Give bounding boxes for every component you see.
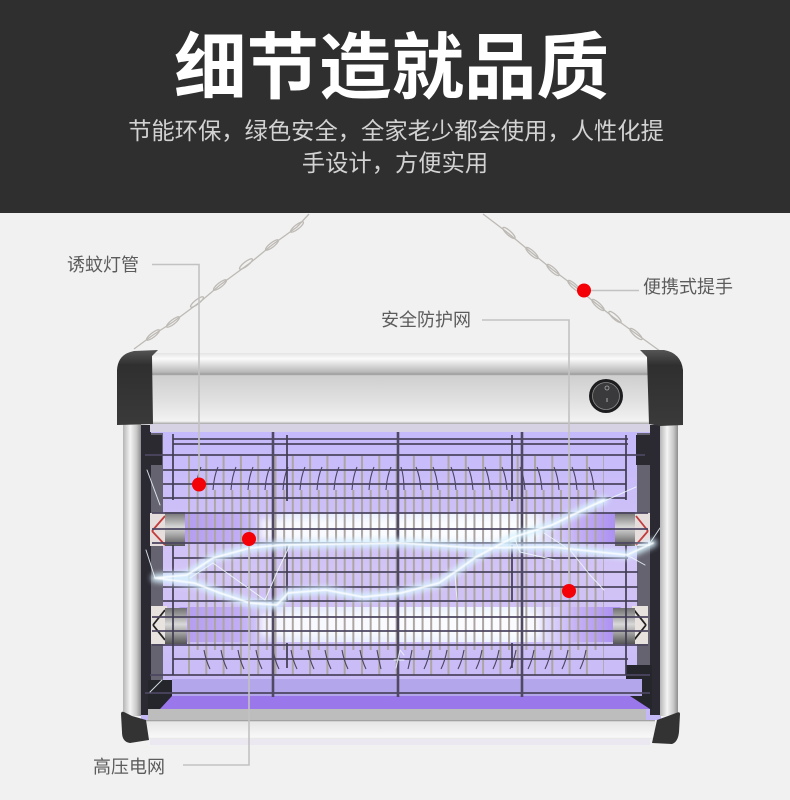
callout: safety net line [482, 320, 576, 598]
silver wires [188, 456, 604, 675]
chains [134, 214, 660, 351]
subtitle text [128, 118, 664, 176]
right bottom cap [652, 712, 680, 744]
left chain [134, 214, 309, 349]
upper tube [178, 513, 622, 544]
callout: lure lamp line [152, 264, 206, 492]
callout: high voltage grid line [183, 532, 256, 765]
arc branches [146, 470, 660, 692]
lower tube [178, 607, 622, 642]
power switch [589, 379, 623, 413]
right chain [483, 214, 660, 351]
lower right socket [613, 606, 648, 644]
electric arcs [146, 470, 660, 692]
left top corner cap [117, 350, 158, 425]
lower left socket [151, 606, 187, 644]
arc glow [155, 500, 653, 605]
callout: handle line [577, 284, 639, 298]
fluorescent tubes [150, 512, 650, 644]
horizontal wires [145, 439, 650, 693]
arc core [155, 500, 653, 605]
inner vertical bars [173, 434, 626, 675]
tube glow [260, 519, 540, 539]
high-voltage grid [145, 425, 650, 697]
right top corner cap [640, 350, 683, 426]
lavender shadow under rail [150, 738, 650, 745]
label: high voltage grid: 高压电网 [93, 757, 165, 777]
bottom white rail [145, 720, 655, 739]
curved fins [196, 467, 594, 669]
subtitle text: 节能环保，绿色安全，全家老少都会使用，人性化提 [128, 118, 664, 144]
under-bar lip [150, 424, 650, 432]
top housing bar [150, 353, 650, 424]
label: lure lamp: 诱蚊灯管 [67, 255, 139, 275]
label: portable handle: 便携式提手 [643, 277, 733, 297]
title: 细节造就品质 [174, 28, 609, 109]
header band [0, 0, 790, 213]
bottom tray [148, 679, 650, 720]
main vertical posts [273, 425, 522, 697]
dark side brackets [141, 425, 660, 715]
label: safety net: 安全防护网 [381, 310, 471, 330]
left post [123, 424, 141, 716]
interior back panel [141, 425, 661, 720]
subtitle text: 手设计，方便实用 [302, 150, 488, 176]
left bottom cap [121, 712, 149, 743]
right post [660, 424, 678, 716]
upper right socket [615, 512, 650, 546]
upper left socket [150, 512, 185, 546]
